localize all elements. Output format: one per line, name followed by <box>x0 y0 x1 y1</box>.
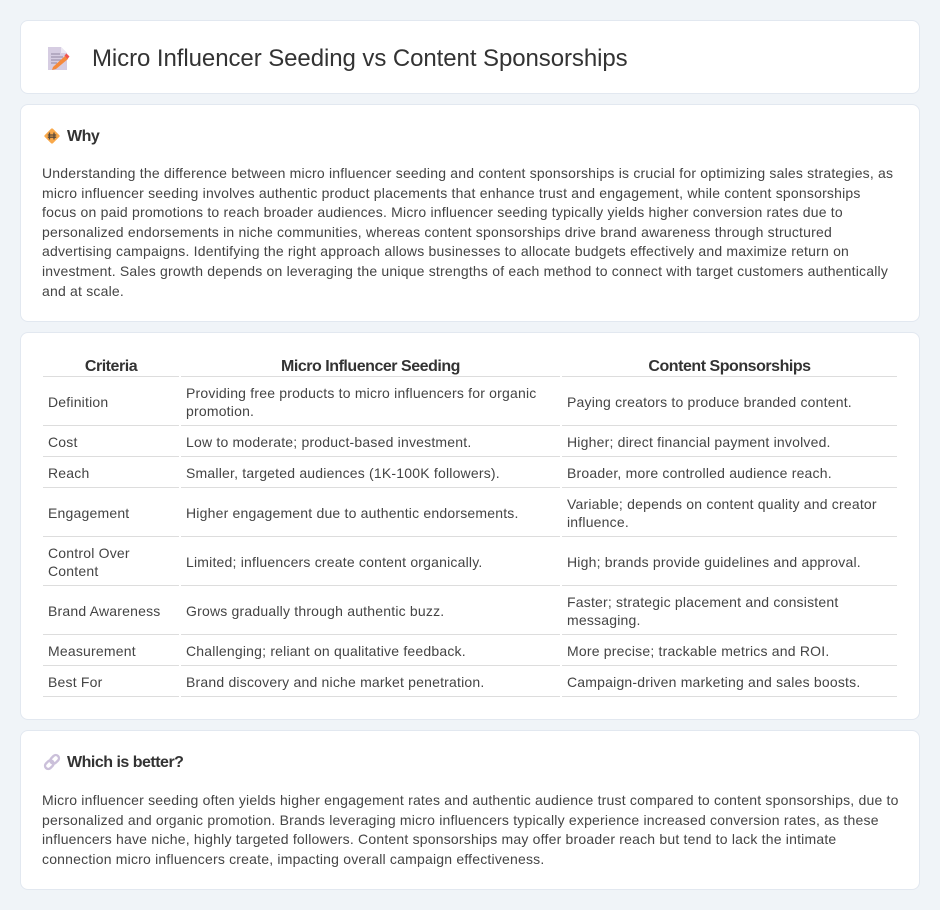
text block: why paragraph <box>42 165 893 299</box>
text block: which is better paragraph: Micro influencer seeding often yields higher engagement rates and authentic audience trust compared to content sponsorships, due to <box>42 792 899 808</box>
text block: why paragraph: investment. Sales growth depends on leveraging the unique strengths of each method to connect with target customers authentically <box>42 263 888 279</box>
text block: why paragraph: micro influencer seeding involves authentic product placements that enhance trust and engagement, while content sponsorships <box>42 185 861 201</box>
comparison table: Paying creators to produce branded content. <box>567 394 852 410</box>
comparison table: Brand discovery and niche market penetration. <box>186 674 484 690</box>
comparison table: Providing free products to micro influencers for organic <box>186 385 536 401</box>
comparison table: Content <box>48 563 98 579</box>
comparison table: Low to moderate; product-based investment. <box>186 434 471 450</box>
text block: why paragraph: Understanding the difference between micro influencer seeding and content sponsorships is crucial for optimizing sales strategies, as <box>42 165 893 181</box>
text block: why paragraph: and at scale. <box>42 283 124 299</box>
comparison table: More precise; trackable metrics and ROI. <box>567 643 829 659</box>
heading: why: Why <box>67 128 99 145</box>
comparison table: Measurement <box>48 643 136 659</box>
comparison table: Variable; depends on content quality and creator <box>567 496 877 512</box>
comparison table: Challenging; reliant on qualitative feedback. <box>186 643 466 659</box>
comparison table <box>43 358 897 697</box>
text block: why paragraph: advertising campaigns. Identifying the right approach allows businesses to allocate budgets effectively and maximize return on <box>42 243 849 259</box>
text block: which is better paragraph <box>42 792 899 867</box>
text block: why paragraph: personalized endorsements in niche communities, whereas content sponsorships drive brand awareness through structured <box>42 224 832 240</box>
comparison table: Campaign-driven marketing and sales boosts. <box>567 674 860 690</box>
comparison table: Smaller, targeted audiences (1K-100K followers). <box>186 465 500 481</box>
heading: which is better: Which is better? <box>67 754 183 771</box>
comparison table: Higher engagement due to authentic endorsements. <box>186 505 519 521</box>
panel: why <box>20 104 920 322</box>
comparison table: Broader, more controlled audience reach. <box>567 465 832 481</box>
comparison table: Grows gradually through authentic buzz. <box>186 603 444 619</box>
icon: chain link <box>44 754 60 770</box>
comparison table: Engagement <box>48 505 129 521</box>
panel: title header <box>20 20 920 94</box>
text block: which is better paragraph: personalized and organic promotion. Brands leveraging micro influencers typically experience increased conversion rates, as these <box>42 812 879 828</box>
comparison table: Higher; direct financial payment involved. <box>567 434 831 450</box>
comparison table: Criteria <box>85 358 137 375</box>
comparison table: Faster; strategic placement and consistent <box>567 594 838 610</box>
icon: document with pencil <box>48 47 70 70</box>
comparison table: Control Over <box>48 545 130 561</box>
comparison table: High; brands provide guidelines and approval. <box>567 554 861 570</box>
comparison table: Cost <box>48 434 78 450</box>
comparison table: promotion. <box>186 403 254 419</box>
comparison table: Best For <box>48 674 103 690</box>
title: Micro Influencer Seeding vs Content Sponsorships <box>92 45 628 72</box>
comparison table: Definition <box>48 394 108 410</box>
comparison table: influence. <box>567 514 629 530</box>
comparison table: Limited; influencers create content organically. <box>186 554 482 570</box>
panel: comparison table <box>20 332 920 720</box>
text block: why paragraph: focus on paid promotions to reach broader audiences. Micro influencer seeding typically yields higher conversion rates due to <box>42 204 843 220</box>
comparison table: Micro Influencer Seeding <box>281 358 460 375</box>
text block: which is better paragraph: connection micro influencers create, impacting overall campaign effectiveness. <box>42 851 544 867</box>
comparison table: Brand Awareness <box>48 603 160 619</box>
comparison table: Content Sponsorships <box>648 358 811 375</box>
comparison table: Reach <box>48 465 89 481</box>
panel: which is better <box>20 730 920 890</box>
comparison table: messaging. <box>567 612 641 628</box>
text block: which is better paragraph: influencers have niche, highly targeted followers. Content sponsorships may offer broader reach but tend to lack the intimate <box>42 831 836 847</box>
icon: orange diamond <box>44 128 60 144</box>
